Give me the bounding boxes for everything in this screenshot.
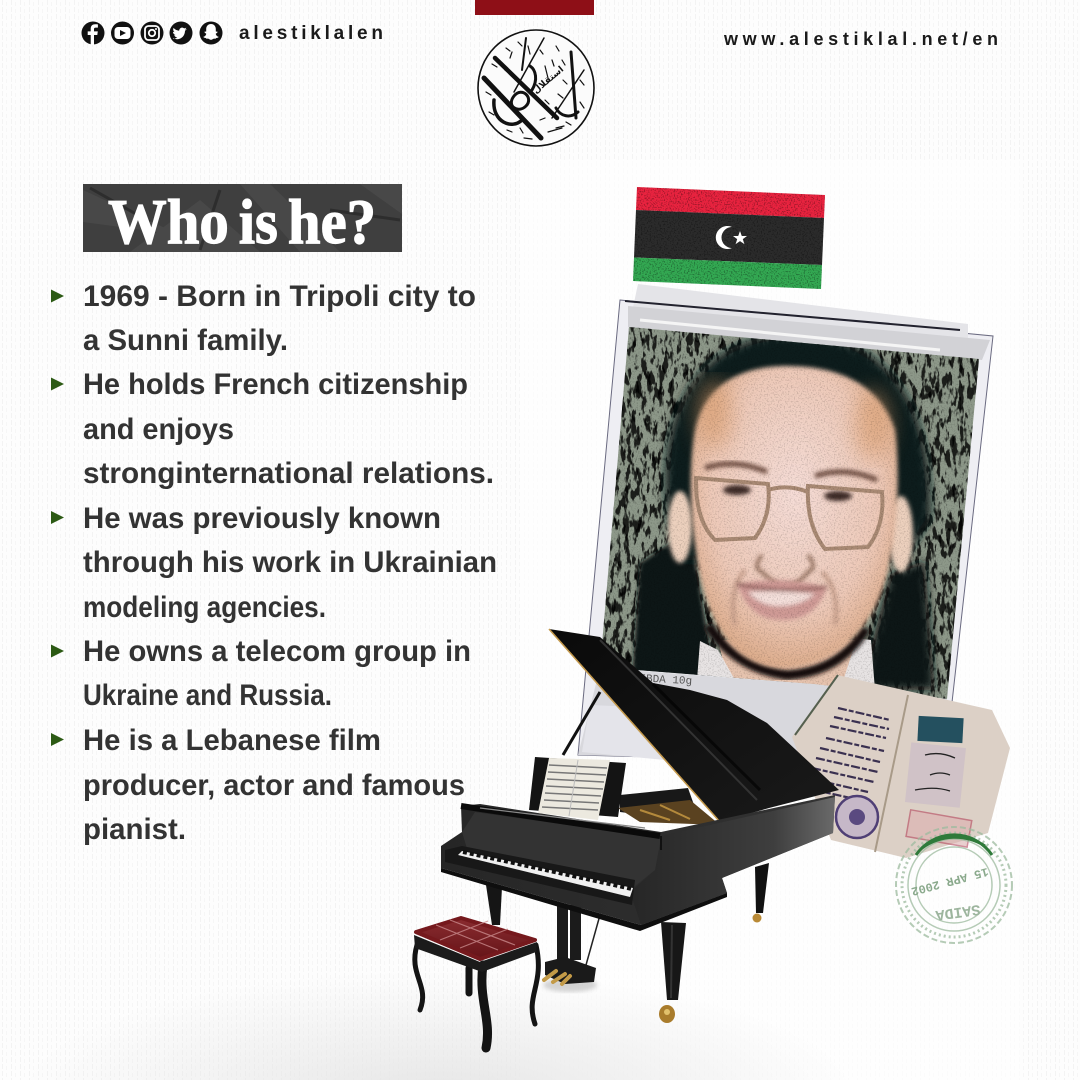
mouth [737,580,827,620]
icon: instagram [140,22,164,44]
piano body [441,795,835,931]
bullet: telecom: Ukraine and Russia. [83,679,332,712]
photo caption strip: TIIBDA 10g [626,673,692,688]
bullet: film and piano [51,724,465,846]
heading: Who is he?: Who is he? [108,187,376,257]
photo paper backing [578,300,993,765]
passport [792,675,1010,858]
crescent and star [716,226,747,249]
glasses [696,478,882,549]
top red tab [475,0,594,15]
back legs [755,863,769,913]
website url: www.alestiklal.net/en [723,29,998,49]
chin shadow [708,625,866,675]
sheet music [538,758,610,820]
bullet: citizenship: and enjoys [83,413,234,446]
grand piano [414,629,839,1048]
photo caption strip [578,668,947,765]
strings and gold frame [618,800,720,825]
bullet: modeling: through his work in Ukrainian [83,546,497,579]
bullet: telecom [51,635,471,712]
bullet: modeling: modeling agencies. [83,591,326,624]
bullet: citizenship: stronginternational relations. [83,457,494,490]
taped photo frame [578,284,993,765]
Libyan flag [633,187,825,289]
bullet: citizenship: He holds French citizenship [83,368,468,401]
pedal lyre [543,905,600,992]
bullet: birth: a Sunni family. [83,324,288,357]
portrait of the man [590,320,990,705]
bullet: birth [51,280,476,357]
visa text lines [808,708,890,799]
lid prop [563,692,600,755]
red box stamp [906,810,972,847]
icon: facebook [82,22,104,45]
bullet: film and piano: pianist. [83,813,186,846]
bullet: modeling: He was previously known [83,502,441,535]
bench frame [414,935,537,972]
nose [757,555,813,587]
purple round seal [836,796,878,838]
bullet: modeling [51,502,497,624]
icon: twitter [170,22,192,44]
logo emblem [478,30,594,146]
keyboard [445,846,635,905]
bullet: birth: 1969 - Born in Tripoli city to [83,280,476,313]
logo emblem: استقلال [531,65,566,96]
suit and hair mass [632,334,935,690]
piano lid [549,629,839,822]
social media icons [82,22,222,45]
front leg [659,922,686,1023]
piano bench [414,918,538,1048]
bullet: telecom: He owns a telecom group in [83,635,471,668]
purple visa stamp [905,742,966,808]
forehead orange tint [697,380,890,460]
green postmark stamp [896,827,1012,943]
green postmark stamp: 15 APR 2002 [910,864,990,898]
red tufted cushion [416,918,535,959]
icon: youtube [111,22,134,44]
biography bullet list [51,280,497,846]
bench legs [415,945,538,1048]
bullet: film and piano: He is a Lebanese film [83,724,381,757]
tape strip [625,284,990,360]
bullet: film and piano: producer, actor and famous [83,769,465,802]
ears [668,491,913,572]
smile folds [733,570,836,625]
blue revenue stamp [917,716,964,743]
neck and collar [697,638,875,690]
bullet: citizenship [51,368,494,490]
social handle: alestiklalen [239,23,383,44]
music stand [529,757,626,817]
underside of lid [620,788,700,822]
green postmark stamp: SAIDA [934,900,981,923]
brows and eyes [705,464,877,501]
face [691,366,898,668]
icon: snapchat [200,22,222,44]
